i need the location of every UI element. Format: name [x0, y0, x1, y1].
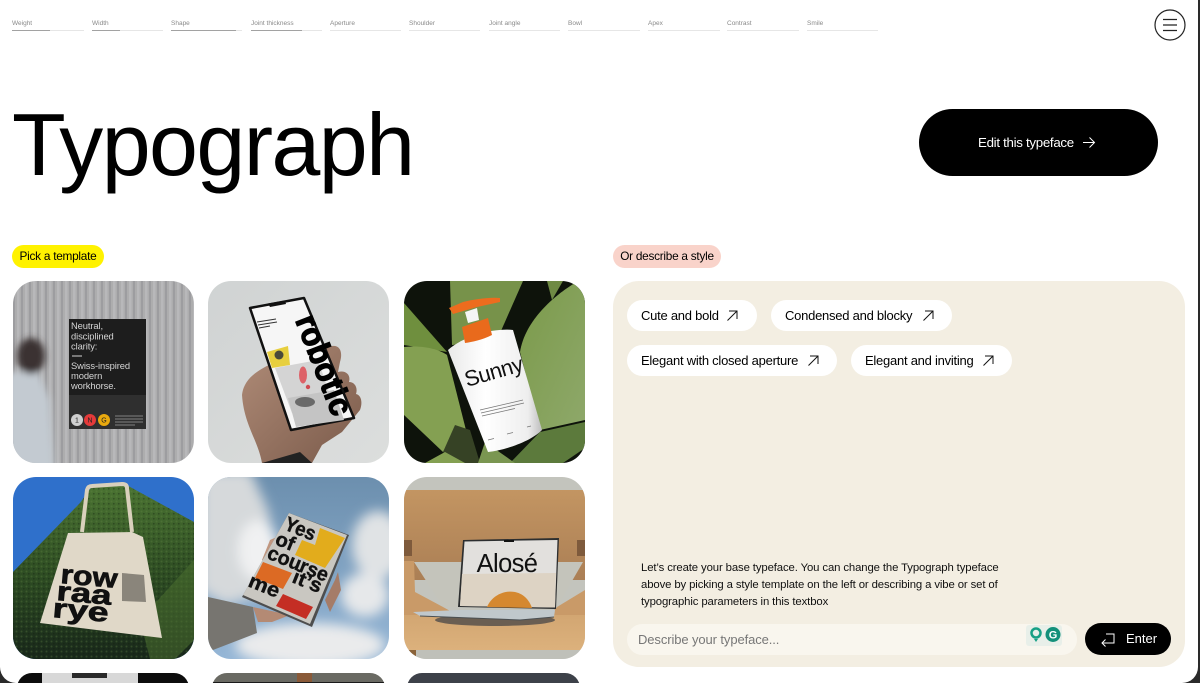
- template: rye tote: raa: [55, 576, 114, 611]
- chip: condensed and blocky: [771, 300, 952, 331]
- tag: pick a template: Pick a template: [20, 249, 96, 263]
- template: swiss poster: Swiss-inspired: [71, 360, 130, 371]
- parameter sliders: Joint angle: [489, 20, 520, 27]
- template: rye tote: rye: [51, 593, 110, 628]
- chip: elegant and inviting: Elegant and inviting: [865, 353, 973, 368]
- template: yes of course book: me: [245, 570, 283, 603]
- chip: cute and bold: [627, 300, 757, 331]
- parameter sliders: Contrast: [727, 20, 752, 27]
- intro text: above by picking a style template on the left or describing a vibe or set of: [641, 579, 998, 591]
- template: rye tote: row: [59, 559, 120, 594]
- template: row three glimpses: [18, 673, 580, 683]
- intro text: Let’s create your base typeface. You can change the Typograph typeface: [641, 562, 999, 574]
- parameter sliders: Joint thickness: [251, 20, 294, 27]
- template: swiss poster: disciplined: [71, 330, 114, 342]
- parameter sliders: [12, 20, 878, 31]
- template: sunny bottle: Sunny: [461, 351, 526, 392]
- parameter sliders: Bowl: [568, 20, 582, 27]
- parameter sliders: Weight: [12, 20, 32, 27]
- intro text: [641, 562, 999, 608]
- input: describe your typeface: [627, 624, 1077, 655]
- template: swiss poster: N: [87, 418, 93, 424]
- tag: pick a template: [12, 245, 104, 268]
- chip: elegant and inviting: [851, 345, 1012, 376]
- intro text: typographic parameters in this textbox: [641, 596, 828, 608]
- icon: grammarly badges: [1026, 625, 1062, 646]
- template: yes of course book: [208, 477, 389, 659]
- template: robotic phone: robotic: [288, 309, 361, 420]
- template: swiss poster: [13, 281, 194, 463]
- template: yes of course book: of: [272, 528, 298, 556]
- template: swiss poster: Neutral,: [71, 320, 103, 331]
- template: yes of course book: Yes: [281, 513, 319, 546]
- parameter sliders: Smile: [807, 20, 823, 27]
- template: swiss poster: modern: [71, 370, 102, 381]
- chip: elegant with closed aperture: Elegant with closed aperture: [641, 353, 798, 368]
- template: sunny bottle: [404, 281, 585, 463]
- parameter sliders: Shoulder: [409, 20, 435, 27]
- button: edit this typeface: [919, 109, 1158, 176]
- template: swiss poster: workhorse.: [70, 380, 116, 391]
- template: yes of course book: course: [264, 542, 332, 587]
- template: alose laptop: Alosé: [477, 550, 538, 578]
- button: enter: [1085, 623, 1171, 655]
- template: rye tote: [13, 477, 194, 659]
- button: enter: Enter: [1126, 631, 1157, 646]
- template: alose laptop: [404, 477, 585, 659]
- tag: or describe a style: [613, 245, 721, 268]
- button: edit this typeface: Edit this typeface: [978, 135, 1074, 150]
- parameter sliders: Width: [92, 20, 109, 27]
- icon: grammarly badges: G: [1049, 630, 1057, 642]
- template: swiss poster: 1: [75, 418, 79, 424]
- parameter sliders: Shape: [171, 20, 190, 27]
- chip: condensed and blocky: Condensed and blocky: [785, 308, 912, 323]
- tag: or describe a style: Or describe a style: [620, 249, 714, 263]
- title: Typograph: [12, 95, 413, 194]
- template: swiss poster: clarity:: [71, 340, 97, 352]
- template: yes of course book: it’s: [289, 566, 325, 598]
- icon: menu: [1154, 9, 1186, 41]
- chip: cute and bold: Cute and bold: [641, 308, 719, 323]
- input: describe your typeface: Describe your typeface...: [638, 632, 779, 647]
- chip: elegant with closed aperture: [627, 345, 837, 376]
- template: swiss poster: G: [101, 418, 107, 424]
- parameter sliders: Aperture: [330, 20, 355, 27]
- parameter sliders: Apex: [648, 20, 663, 27]
- panel: describe a style: [613, 281, 1185, 667]
- template: robotic phone: [208, 281, 389, 463]
